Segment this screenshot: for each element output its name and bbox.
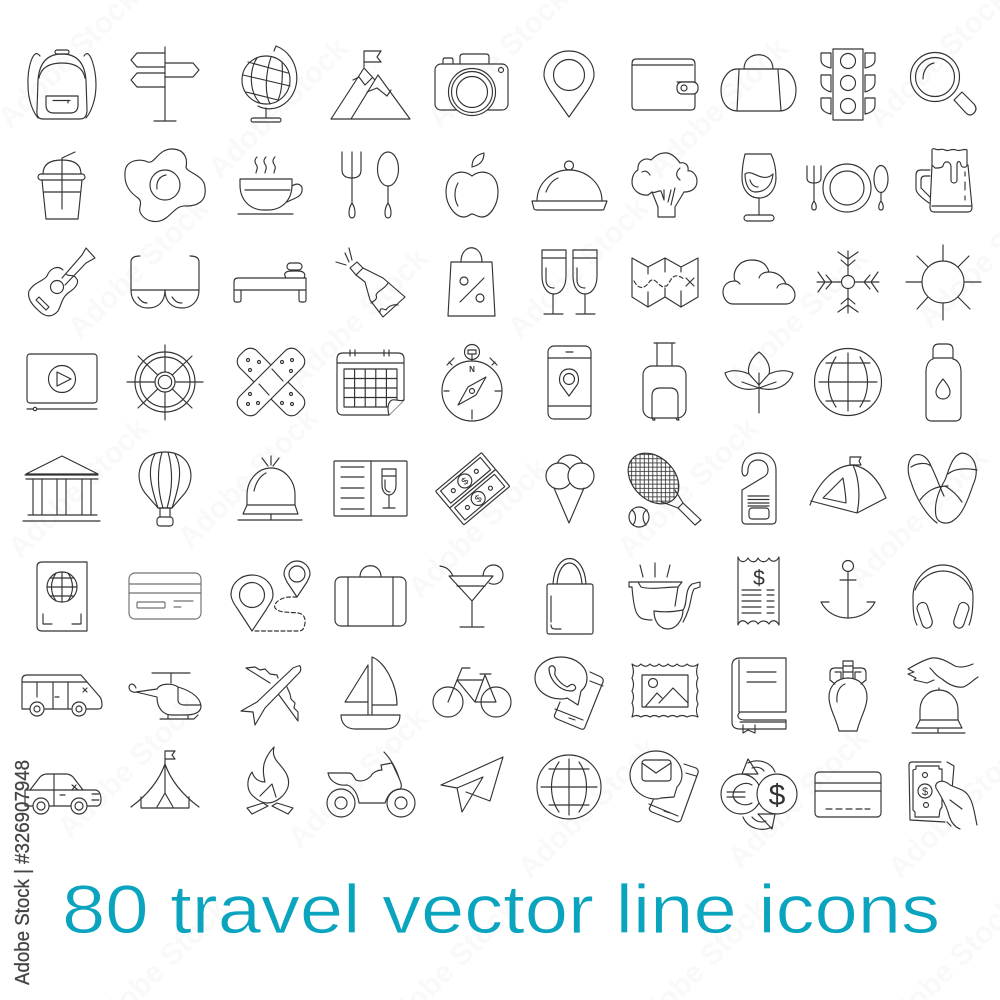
icon: compass (442, 344, 502, 421)
icon: discount shopping bag (448, 248, 495, 316)
icon: banknotes: $ (473, 493, 485, 505)
faint diagonal watermark: Adobe Stock (282, 702, 435, 855)
faint diagonal watermark: Adobe Stock (2, 412, 155, 565)
icon: backpack (28, 50, 96, 119)
icon: door hanger (742, 453, 776, 524)
icon: folded map (632, 258, 698, 307)
icon: helicopter (129, 673, 201, 719)
icon: fried egg (125, 149, 205, 221)
faint diagonal watermark: Adobe Stock (722, 722, 875, 875)
icon: apple (446, 153, 498, 217)
icon: car (25, 774, 101, 814)
icon: minibus (22, 675, 102, 716)
icon: crossed bandages (234, 345, 308, 419)
icon: bicycle (433, 668, 511, 717)
icon: calendar (337, 350, 404, 415)
icon: signpost (131, 47, 199, 121)
faint diagonal watermark: Adobe Stock (722, 242, 875, 395)
icon: food cloche (532, 161, 607, 210)
icon: airplane (241, 666, 301, 725)
faint diagonal watermark: Adobe Stock (512, 732, 665, 885)
icon: route between pins (231, 561, 310, 631)
icon: massage bed with stones (234, 263, 306, 302)
icon: phone with pin (548, 346, 591, 419)
icon: champagne flutes (542, 250, 597, 314)
icon: tennis racket (618, 443, 701, 527)
icon: campfire (247, 747, 293, 814)
icon: tote bag (547, 558, 593, 634)
icon: hot air balloon (139, 452, 191, 526)
icon: banknotes (436, 453, 510, 525)
icon: trolley suitcase (643, 343, 686, 420)
icon: suitcase (335, 566, 406, 626)
icon: camera (435, 54, 508, 116)
faint diagonal watermark: Adobe Stock (202, 32, 355, 185)
icon: spa water bowl (629, 563, 700, 629)
icon: desk globe (242, 46, 297, 122)
icon: water bottle (926, 344, 961, 421)
faint diagonal watermark: Adobe Stock (172, 402, 325, 555)
icon: video player (27, 354, 97, 411)
icon: ship wheel (127, 345, 203, 420)
faint diagonal watermark: Adobe Stock (502, 192, 655, 345)
icon: postage stamp photo (632, 664, 698, 717)
icon: dome tent (810, 457, 886, 513)
icon: motorcycle (327, 752, 415, 817)
icon: iced drink cup (38, 152, 85, 219)
icon: book (732, 658, 786, 733)
icon: sun (906, 245, 981, 320)
icon: receipt: $ (753, 567, 765, 590)
icon: passport (37, 562, 87, 631)
icon: traffic light (821, 49, 875, 120)
icon: classical bank building (23, 456, 100, 521)
icon: wine glass (742, 154, 776, 221)
icon: currency exchange: $ (769, 779, 786, 812)
icon: sailboat (341, 657, 400, 729)
icon: magnifier (910, 52, 976, 115)
icon: plate setting (807, 164, 888, 212)
icon: sunglasses (131, 256, 199, 308)
faint diagonal watermark: Adobe Stock (62, 192, 215, 345)
icon: amphora (829, 661, 867, 731)
icon: wallet (632, 59, 698, 110)
faint diagonal watermark: Adobe Stock (612, 412, 765, 565)
icon: broccoli (632, 153, 697, 217)
vertical stock id text: Adobe Stock | #326907948 (12, 760, 34, 985)
icon: paper plane (441, 757, 503, 812)
icon: fork and spoon (342, 152, 398, 218)
icon: coffee cup (238, 157, 302, 214)
icon: cloud (723, 260, 795, 304)
icon: ice cream cone (546, 455, 594, 523)
icon: location pin (544, 51, 594, 117)
icon: phone call bubble (535, 657, 603, 729)
faint diagonal watermark: Adobe Stock (642, 32, 795, 185)
icon: camping tent (131, 751, 199, 808)
faint diagonal watermark: Adobe Stock (282, 242, 435, 395)
icon grid (22, 46, 981, 829)
faint diagonal watermark: Adobe Stock (52, 692, 205, 845)
icon: open menu (334, 461, 407, 516)
icon: banknotes: $ (460, 475, 471, 488)
icon: bank card (815, 772, 881, 817)
title: 80 travel vector line icons (62, 871, 940, 948)
faint diagonal watermark: Adobe Stock (842, 442, 995, 595)
icon: credit card (129, 573, 201, 619)
icon: cash in hand (909, 762, 977, 829)
icon: three leaves (725, 352, 793, 413)
icon: currency exchange (721, 759, 797, 829)
icon: martini (440, 565, 503, 627)
icon: service bell (238, 456, 302, 520)
icon: headphones (913, 565, 973, 628)
icon: guitar (29, 248, 95, 316)
icon: phone mail bubble (630, 751, 698, 822)
icon: receipt (738, 557, 779, 625)
icon: compass: N (469, 365, 475, 374)
faint diagonal watermark: Adobe Stock (402, 452, 555, 605)
icon: mountain flag (331, 51, 410, 119)
icon: cash in hand: $ (922, 786, 928, 798)
icon: beer mug (916, 149, 972, 212)
icon: world globe (814, 348, 882, 416)
icon: champagne bottle (336, 248, 405, 317)
icon: hand over bell (908, 658, 978, 733)
icon: anchor (821, 560, 875, 618)
icon: flip flop slippers (908, 453, 977, 523)
icon: duffle bag (721, 55, 796, 111)
icon: snowflake (817, 251, 879, 313)
icon: world globe two (537, 755, 601, 819)
